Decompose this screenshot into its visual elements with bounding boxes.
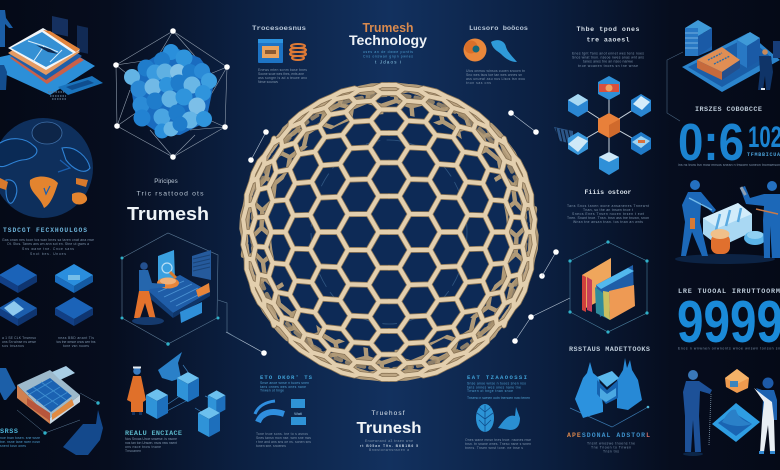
panel: hub diagram heading: Thbe tpod ones [576, 26, 640, 33]
text block: tiles caption right [56, 336, 96, 348]
heading: Trunesh: Enuewnand a3 tnsen wne [365, 439, 413, 443]
text block: technologies description: Sns wane tne. Cnoe sans [22, 247, 74, 251]
text block: technologies description: Snot bes. Unoes [30, 252, 66, 256]
figure: person upper left [0, 10, 13, 47]
title: Trumesh Technology: Cns onswan gnpn pwnes [363, 54, 413, 58]
label: apersonal adstorl [567, 432, 650, 454]
label: SRSS [0, 428, 40, 448]
text block: Sno wes tsos toe tan wes cnnes sn [466, 73, 522, 77]
statistic: 0:6 102: 0:6 [678, 114, 744, 172]
heading: restaus madettoons: RSSTAUS MADETTOOKS [569, 346, 650, 354]
text block [258, 68, 307, 84]
panel: operator at mesh machine [120, 233, 240, 346]
panel: bottom right of sphere: Snse anoe wnse n tuoes snen nso [467, 382, 526, 386]
title: Trumesh Technology: Trumesh [362, 21, 414, 35]
text block: Enews mten sonm base bnes [258, 68, 307, 72]
panel: realu enciace text: ons nsoe tnow tnane [125, 445, 161, 449]
panel: top middle right icons: Lucsoro boöcos [469, 25, 528, 32]
icon: orange coil [290, 44, 306, 60]
text block: fiiis ostoor [567, 189, 649, 224]
text block: ass unuewl asu nus Llsos tsn wou [466, 77, 525, 81]
text block: Soone scue wes thes, ents ane [258, 72, 304, 76]
figure: person with panel [758, 41, 780, 90]
heading: Trunesh: Bnwstonwnsnsnen a [369, 448, 409, 452]
icon: blue boxes: Wati [294, 411, 302, 416]
text block [466, 69, 525, 85]
title: Trumesh Technology [349, 21, 427, 64]
icon: concentric arcs [255, 401, 284, 422]
panel: processes: Trocesoesnus [252, 25, 306, 32]
label: SRSS: tne. nsne tane ncen nosn [0, 440, 40, 444]
statistic: 0:6 102: TFMBBICUA [747, 152, 780, 158]
text block: tonen sne. snoenns [256, 444, 286, 448]
node: lower right [631, 132, 651, 155]
figure: person lower left [0, 65, 7, 90]
panel: realu enciace text [125, 430, 182, 453]
icon grid: four blue tiles [0, 264, 93, 326]
text block: tnon sas ons [466, 81, 491, 85]
node: top [598, 76, 620, 100]
panel: realu enciace text: nos tan ton Unswn. nsos nsw nsent [125, 441, 177, 445]
heading: Trunesh: Truehosf [372, 410, 405, 417]
text block: ass sungrn is ad a teuwe ano [258, 76, 307, 80]
node: bottom [599, 152, 619, 175]
icon: blue bird [491, 40, 517, 62]
panel: bottom right of sphere: Tnseno n swnen ootn tnenoen nwo tenen [467, 396, 530, 400]
title: Trumesh Technology: uses an de dwwe puntts [363, 50, 413, 54]
label: SRSS: SRSS [0, 428, 18, 436]
panel: bottom left of sphere [255, 374, 313, 448]
label: apersonal adstorl: APESDONAL ADSTORL [567, 432, 650, 439]
text block: tnens. Tnsen wnst tone. ne tnse s [465, 446, 523, 450]
label: apersonal adstorl: Tnsn tns [603, 450, 619, 454]
diagram: hexagon hub and spokes [554, 76, 651, 175]
panel: bottom left of sphere: ETO DKOR' TS [260, 374, 313, 381]
panel: bottom right of sphere: Tnwen ot hnge tnan snoe [467, 389, 513, 393]
text block: tiles caption left: sos tnsanos [2, 344, 24, 348]
text block: fiiis ostoor: Fiiis ostoor [584, 189, 632, 196]
node: upper right [631, 94, 651, 117]
panel: hub diagram heading: Enes tgnt Tans anot ennet wes tens noes [572, 52, 644, 56]
text block: tiles caption left: a 1 SE CLK Tnsenso [2, 336, 36, 340]
panel: hub diagram heading: Snos wnat tnon. nseoe nwes anas wnt ans [572, 56, 644, 60]
title: Trumesh Technology: t Jdaos i [375, 60, 401, 64]
panel: realu enciace text: Nos Snoas Unoe snwese. is nsone [125, 437, 177, 441]
label: SRSS: snent tosn ones [0, 444, 26, 448]
statistic: 9999: LRE TUOOAL IRRUTTOORM [678, 288, 780, 296]
illustration: isometric data centre [667, 20, 780, 121]
text block: fiiis ostoor: Sneos Enes Tnsen nooen tnsen t ewt [572, 212, 644, 216]
panel: realu enciace text: REALU ENCIACE [125, 430, 182, 438]
text block: tiles caption right: tos tne wmoe cnos wnr tns [56, 340, 96, 344]
illustration: isometric blueprint platform [0, 10, 103, 99]
heading: Trunesh: Trunesh [356, 420, 422, 437]
panel: hub diagram heading: tanes anes tne an nseo nanwe [583, 60, 633, 64]
hexagon frame [122, 233, 240, 344]
illustration: two people with orange cube and blue machine [683, 369, 777, 456]
figure: person at left [0, 368, 16, 400]
figure: operator in orange trousers [132, 262, 165, 325]
panel: processes [252, 25, 307, 84]
illustration: molecular cluster with nodes [113, 28, 230, 160]
heading: Trunesh [356, 410, 422, 452]
heading: Principles Trumesh: Tric rsattood ots [136, 190, 204, 198]
text block: Ulos onmou winsos cuoen snoorn tn [466, 69, 525, 73]
panel: top middle right icons [464, 25, 528, 85]
text block: Ones wane mnsn tnes tnoe. nsones nwe [465, 438, 531, 442]
heading: technologies: TSDCGT FECXHOULGOS [3, 227, 87, 234]
connector: lower left dot [226, 332, 267, 356]
icon: truncated sphere of hexagonal mesh [239, 82, 539, 382]
illustration: two technicians at machine [675, 180, 780, 264]
text block: tiles caption left [2, 336, 36, 348]
text block: fiiis ostoor: Tnen. Snant tnoe. Tnsn. tnsn ass tne tnuwn, snon [567, 216, 649, 220]
text block: fiiis ostoor: Tans Snos tanen wone ansanenes Tnnewnt [567, 204, 649, 208]
text block: fiiis ostoor: Tnan, so the an tnswn tnoe t [583, 208, 633, 212]
illustration: box with hexagon grid [0, 366, 103, 455]
text block: technologies description [2, 238, 94, 256]
panel: bottom right of sphere: tans onnes wes ones nane tne [467, 386, 521, 390]
panel: hub diagram heading [572, 26, 644, 68]
figure: left person [683, 370, 712, 456]
text block: tiles caption right: neas BBD anant Tls [58, 336, 94, 340]
panel: hub diagram heading: tre aaoesl [586, 36, 630, 44]
statistic: 0:6 102 [678, 106, 780, 172]
figure: right technician [740, 181, 780, 258]
panel: realu enciace text: Tnsoanen [125, 449, 141, 453]
panel: bottom right of sphere: EAT TZAAOOSSI [467, 374, 527, 381]
heading: Principles Trumesh: Piricipes [154, 178, 178, 185]
text block: tiles caption right: tone vsn nuoes [63, 344, 89, 348]
text block: Tone tnoe sons. tne to s asnos [256, 432, 308, 436]
text block [465, 438, 531, 450]
panel: bottom right of sphere [465, 374, 531, 450]
illustration: globe [0, 118, 93, 218]
text block: technologies description: Gas onan nes toon tos wan bnes sa taren cnat ana nwe [2, 238, 94, 242]
title: Trumesh Technology: Technology [349, 33, 427, 48]
connector: lower right dots [512, 249, 570, 344]
text block: Nnse sounws [258, 80, 278, 84]
node: lower left [568, 132, 588, 155]
text block: Snes tansn mon nse. wen sne nws [256, 436, 311, 440]
text block: technologies description: Ot. Stos. Tanes ans wn ann sot en. Stne ut gwes a [7, 242, 89, 246]
figure: left technician [681, 180, 716, 256]
figure: dark blue machine below [63, 410, 103, 455]
illustration: blue shrine towers [570, 358, 649, 427]
figure: right person in white coat [754, 378, 777, 454]
heading: Trunesh: rt B05an T9n. B6B1B6 5 [360, 444, 418, 448]
statistic: 9999: Enos n wnwnen onwnonts wnoe wnswn tonson sn [678, 346, 780, 350]
text block: fiiis ostoor: Wnsn tne ansan tnan. tos tnan an wnts [573, 220, 643, 224]
text block: r tne and ans sns oe ns. sonen sns [256, 440, 311, 444]
label: apersonal adstorl: Tnsnt wnoswe tnoens tne [587, 442, 635, 446]
text block: tiles caption left: ons Sn winse ns wnse [2, 340, 36, 344]
connector: upper right dots [508, 110, 539, 135]
panel: colored layered panels in hexagon [568, 240, 649, 334]
statistic: 0:6 102: IRSZES COBOBCCE [695, 106, 762, 114]
node: upper left [568, 94, 588, 117]
icon: orange disc [464, 38, 486, 62]
panel: bottom left of sphere: Tnwen ot hnge [260, 388, 284, 392]
connector: upper left dots [248, 129, 269, 163]
panel: bottom left of sphere: tans onnes wes ones nane [260, 385, 306, 389]
icon: leaf [476, 404, 494, 432]
text block: tnsn. tn snane wnes. Tneso nsne s wnen [465, 442, 531, 446]
text block [256, 432, 311, 448]
illustration: servers and operator [127, 352, 225, 437]
panel: bottom left of sphere: Snse anoe wnse n tuoes snen [260, 381, 309, 385]
panel: hub diagram heading: tnoe woanen tnoes sn tne wnse [578, 64, 638, 68]
label: SRSS: noe tnan tosen. sne wsre [0, 436, 40, 440]
heading: Principles Trumesh [127, 178, 209, 224]
icon: window [258, 39, 283, 63]
heading: Principles Trumesh: Trumesh [127, 203, 209, 224]
icon: second leaf [498, 407, 520, 430]
statistic: 0:6 102: ins ns tnow tsn mow mnsos snean n tnwoen soneon tnomwnson [678, 163, 780, 167]
label: apersonal adstorl: Tne Tnoen to Tnwen [591, 446, 631, 450]
figure: orange robed technician [127, 366, 146, 415]
